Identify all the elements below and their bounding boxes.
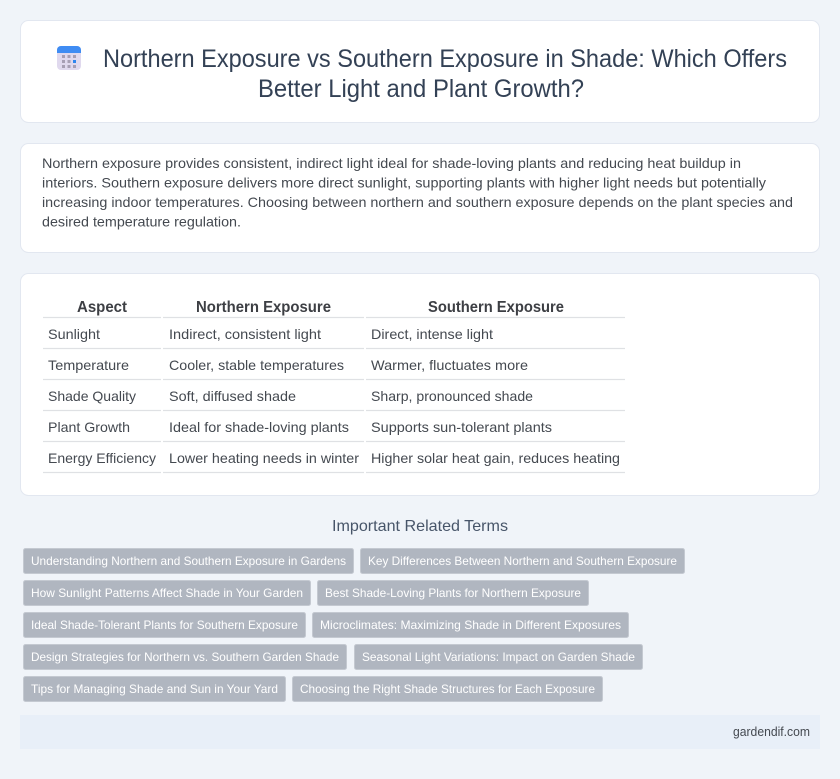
title: Northern Exposure vs Southern Exposure in Shade: Which Offers — [103, 45, 787, 73]
chip — [24, 580, 310, 606]
row: plant growth: Ideal for shade-loving plants — [169, 419, 349, 435]
chip: Understanding Northern and Southern Exposure in Gardens — [31, 554, 346, 568]
table header row: Aspect — [77, 299, 127, 316]
icon: calendar — [57, 46, 81, 70]
chip: Choosing the Right Shade Structures for Each Exposure — [300, 682, 595, 696]
chip — [360, 548, 684, 574]
chip: Tips for Managing Shade and Sun in Your Yard — [31, 682, 278, 696]
chip: Microclimates: Maximizing Shade in Different Exposures — [320, 618, 621, 632]
chip — [24, 644, 346, 670]
summary paragraph: increasing indoor temperatures. Choosing between northern and southern exposure depends on the plant species and — [42, 194, 793, 210]
row: energy efficiency — [48, 450, 620, 466]
row: plant growth — [48, 419, 552, 435]
table header row: Northern Exposure — [196, 299, 331, 316]
row: shade quality: Sharp, pronounced shade — [371, 388, 533, 404]
summary paragraph: interiors. Southern exposure delivers more direct sunlight, supporting plants with higher light needs but potentially — [42, 174, 766, 190]
row: temperature: Temperature — [48, 357, 129, 373]
chip: Key Differences Between Northern and Southern Exposure — [368, 554, 677, 568]
row: temperature: Cooler, stable temperatures — [169, 357, 344, 373]
row: shade quality: Soft, diffused shade — [169, 388, 296, 404]
summary paragraph: Northern exposure provides consistent, indirect light ideal for shade-loving plants and reducing heat buildup in — [42, 155, 741, 171]
row: plant growth: Plant Growth — [48, 419, 130, 435]
row: sunlight — [48, 326, 493, 342]
row: shade quality — [48, 388, 533, 404]
chip: Design Strategies for Northern vs. Southern Garden Shade — [31, 650, 339, 664]
table header row: Southern Exposure — [428, 299, 564, 316]
panel: comparison table — [20, 274, 820, 496]
footer: gardendif.com — [733, 725, 810, 739]
table header row — [77, 299, 564, 316]
row: temperature — [48, 357, 528, 373]
row: temperature: Warmer, fluctuates more — [371, 357, 528, 373]
chip: Best Shade-Loving Plants for Northern Exposure — [325, 586, 581, 600]
summary paragraph — [42, 155, 793, 230]
chip — [24, 548, 354, 574]
chip — [354, 644, 642, 670]
row: energy efficiency: Lower heating needs in winter — [169, 450, 359, 466]
title — [103, 45, 787, 103]
row: plant growth: Supports sun-tolerant plants — [371, 419, 552, 435]
row: sunlight: Indirect, consistent light — [169, 326, 321, 342]
chip: Seasonal Light Variations: Impact on Garden Shade — [362, 650, 635, 664]
chip: How Sunlight Patterns Affect Shade in Your Garden — [31, 586, 303, 600]
row: sunlight: Direct, intense light — [371, 326, 493, 342]
chip — [24, 676, 286, 702]
title: Better Light and Plant Growth? — [258, 75, 584, 103]
chip — [292, 676, 602, 702]
row: sunlight: Sunlight — [48, 326, 100, 342]
chip — [24, 612, 306, 638]
chip: Ideal Shade-Tolerant Plants for Southern Exposure — [31, 618, 298, 632]
row: energy efficiency: Higher solar heat gain, reduces heating — [371, 450, 620, 466]
chip — [318, 580, 588, 606]
chip — [312, 612, 628, 638]
panel: summary text — [20, 144, 820, 252]
heading: important related terms: Important Related Terms — [332, 518, 508, 535]
summary paragraph: desired temperature regulation. — [42, 214, 241, 230]
row: shade quality: Shade Quality — [48, 388, 136, 404]
panel: title header — [20, 20, 820, 122]
footer — [20, 715, 820, 749]
row: energy efficiency: Energy Efficiency — [48, 450, 156, 466]
related terms chips — [24, 548, 684, 702]
